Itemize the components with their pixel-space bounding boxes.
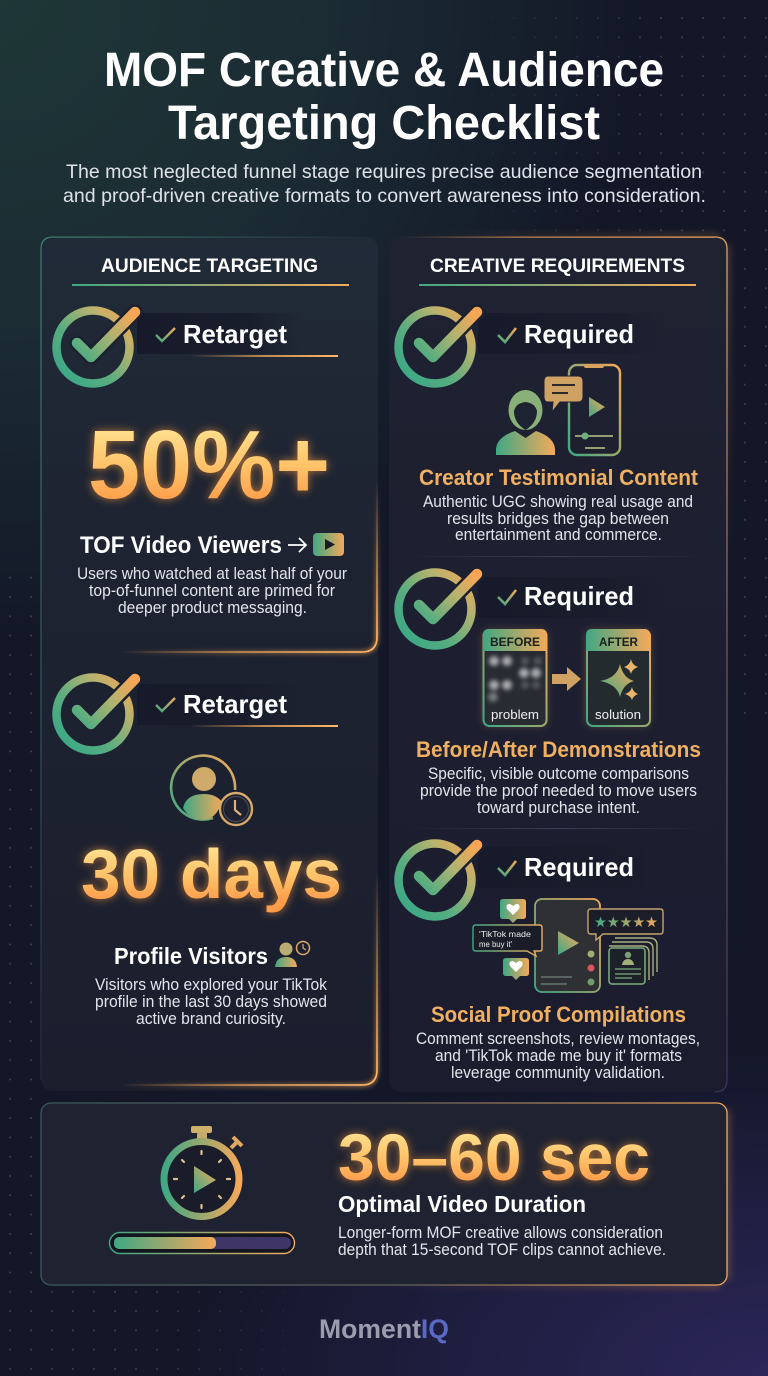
icon: after card: AFTER — [599, 637, 639, 649]
description: creator testimonial: entertainment and commerce. — [455, 526, 662, 544]
label: optimal video duration: Optimal Video Duration — [338, 1191, 586, 1217]
title: MOF Creative & Audience — [104, 44, 664, 97]
badge: required 3 — [398, 844, 663, 916]
description: social proof: leverage community validation. — [451, 1064, 665, 1082]
badge: required 1: Required — [524, 319, 634, 349]
description: social proof — [416, 1030, 700, 1082]
description: profile visitors: active brand curiosity. — [136, 1010, 286, 1028]
label: profile visitors: Profile Visitors — [114, 943, 268, 969]
icon: social proof collage: 'TikTok made — [479, 929, 531, 939]
description: optimal duration — [338, 1224, 666, 1259]
description: profile visitors: profile in the last 30 days showed — [95, 993, 327, 1011]
heading: creative requirements: CREATIVE REQUIREMENTS — [430, 255, 685, 277]
icon: after card: solution — [595, 707, 641, 722]
description: before/after: toward purchase intent. — [477, 799, 640, 817]
description: social proof: Comment screenshots, review montages, — [416, 1030, 700, 1048]
label: TOF video viewers: TOF Video Viewers — [80, 532, 282, 559]
description: TOF video viewers: top-of-funnel content are primed for — [89, 582, 335, 600]
stat: 30-60 sec: 30–60 sec — [338, 1120, 650, 1194]
description: TOF video viewers: Users who watched at least half of your — [77, 565, 347, 583]
description: TOF video viewers: deeper product messaging. — [118, 599, 307, 617]
badge: retarget 1 — [56, 310, 338, 384]
description: profile visitors: Visitors who explored your TikTok — [95, 976, 328, 994]
subtitle: and proof-driven creative formats to convert awareness into consideration. — [63, 185, 706, 207]
icon: social proof collage: ★★★★★ — [594, 915, 658, 931]
description: profile visitors — [95, 976, 328, 1028]
icon: profile with clock — [171, 756, 252, 825]
progress bar — [110, 1232, 294, 1254]
subtitle — [63, 161, 706, 207]
icon: before card: problem — [491, 707, 539, 722]
description: before/after: Specific, visible outcome comparisons — [428, 765, 689, 783]
icon: before card: BEFORE — [490, 637, 540, 649]
description: TOF video viewers — [77, 565, 347, 617]
description: before/after: provide the proof needed to move users — [420, 782, 697, 800]
badge: required 3: Required — [524, 852, 634, 882]
icon: before card — [483, 629, 547, 726]
description: social proof: and 'TikTok made me buy it' formats — [435, 1047, 682, 1065]
badge: required 2 — [398, 572, 663, 646]
title: Targeting Checklist — [168, 97, 600, 150]
title — [104, 44, 664, 150]
icon: after card — [586, 629, 650, 726]
panel: optimal video duration — [41, 1103, 729, 1287]
icon: social proof collage: me buy it' — [479, 939, 512, 949]
icon: stopwatch — [164, 1126, 242, 1216]
logo: MomentIQ: MomentIQ — [319, 1314, 449, 1344]
badge: required 1 — [398, 310, 663, 384]
badge: retarget 2 — [56, 678, 338, 750]
description: optimal duration: depth that 15-second TOF clips cannot achieve. — [338, 1241, 666, 1259]
panel: creative requirements — [389, 235, 729, 1092]
subtitle: The most neglected funnel stage requires precise audience segmentation — [66, 161, 702, 183]
badge: required 2: Required — [524, 581, 634, 611]
description: creator testimonial: results bridges the gap between — [447, 510, 669, 528]
icon: creator with phone — [496, 364, 620, 455]
badge: retarget 1: Retarget — [183, 319, 287, 349]
stat: 50%+: 50%+ — [88, 410, 330, 519]
stat: 30 days: 30 days — [81, 835, 342, 913]
heading: audience targeting: AUDIENCE TARGETING — [101, 255, 318, 277]
panel: audience targeting — [41, 236, 378, 1091]
badge: retarget 2: Retarget — [183, 689, 287, 719]
heading: social proof compilations: Social Proof Compilations — [431, 1002, 686, 1027]
description: creator testimonial: Authentic UGC showing real usage and — [423, 493, 693, 511]
heading: before/after demonstrations: Before/After Demonstrations — [416, 737, 701, 762]
description: before/after — [420, 765, 697, 817]
arrow: before to after — [552, 667, 581, 691]
heading: creator testimonial content: Creator Testimonial Content — [419, 465, 699, 490]
icon: social proof collage — [473, 899, 663, 992]
description: optimal duration: Longer-form MOF creative allows consideration — [338, 1224, 663, 1242]
description: creator testimonial — [423, 493, 693, 544]
